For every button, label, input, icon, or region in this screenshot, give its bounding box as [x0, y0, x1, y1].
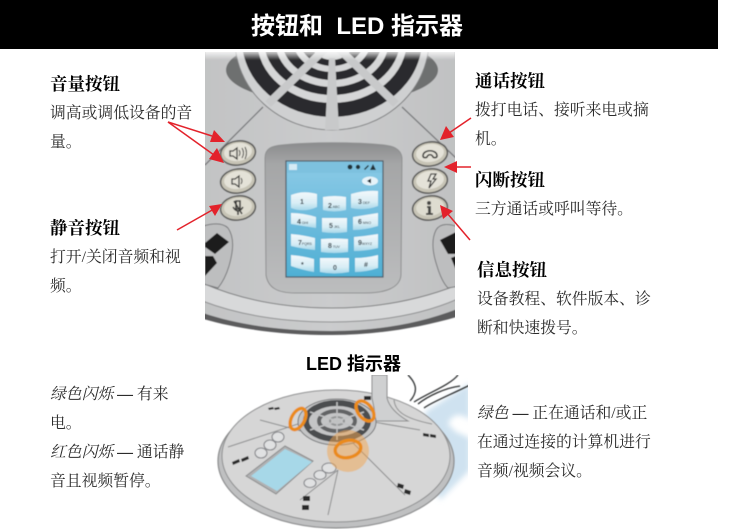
description: flash: 三方通话或呼叫等待。 — [475, 201, 633, 218]
device photo: phone top view — [205, 52, 455, 336]
keypad: 8 TUV — [328, 243, 340, 250]
description: mute: 频。 — [50, 278, 82, 295]
arrow to mute — [177, 204, 222, 230]
button: talk — [411, 140, 449, 168]
text block: flash — [475, 170, 633, 218]
panel seams — [228, 400, 432, 515]
oval buttons — [255, 432, 336, 488]
button: volume up — [219, 139, 257, 167]
speaker pad right — [432, 224, 455, 288]
keypad: 4 GHI — [297, 219, 308, 226]
keypad — [291, 191, 378, 274]
button: info — [411, 194, 449, 222]
description: mute — [50, 248, 181, 295]
speaker grille small — [298, 399, 376, 445]
description: info — [477, 290, 651, 337]
back key — [362, 176, 378, 186]
base disc — [216, 430, 456, 529]
LED indicator rings — [287, 398, 378, 460]
description: info: 设备教程、软件版本、诊 — [477, 291, 651, 308]
keypad: 0 — [333, 265, 337, 272]
blue backdrop — [425, 383, 470, 500]
red arrows — [168, 118, 471, 240]
small screen — [246, 446, 313, 494]
button: mute — [219, 194, 257, 222]
heading: info: 信息按钮 — [477, 260, 547, 280]
text block: LED green state: 在通过连接的计算机进行 — [477, 434, 651, 451]
description: mute: 打开/关闭音频和视 — [50, 249, 181, 266]
text block: volume — [50, 74, 192, 151]
keypad: 1 — [300, 199, 304, 206]
title: 按钮和 LED 指示器 — [251, 13, 463, 40]
LED highlight glow — [327, 430, 369, 472]
text block: LED green state: 绿色 — 正在通话和/或正 — [477, 405, 647, 422]
description: volume: 调高或调低设备的音 — [50, 105, 192, 122]
heading: LED indicators: LED 指示器 — [306, 354, 401, 374]
device photo: LED ring illustration — [218, 375, 470, 528]
description: talk: 拨打电话、接听来电或摘 — [475, 102, 649, 119]
heading: volume: 音量按钮 — [50, 74, 120, 94]
arrow to talk — [440, 118, 471, 140]
touch screen — [286, 161, 383, 277]
keypad: 9WXYZ — [358, 240, 373, 247]
pads — [232, 396, 436, 510]
arrow to info — [440, 205, 470, 240]
description: volume — [50, 104, 192, 151]
display bezel — [265, 143, 402, 293]
keypad: 2 ABC — [328, 203, 340, 210]
keypad: 6 MNO — [358, 219, 371, 226]
description: info: 断和快速拨号。 — [477, 320, 588, 337]
device body — [200, 48, 460, 335]
text block: LED flash states — [50, 385, 184, 490]
description: volume: 量。 — [50, 134, 82, 151]
text block: LED green state — [477, 404, 651, 480]
speaker grille — [205, 52, 455, 166]
top fade — [205, 52, 455, 60]
text block: LED green state: 音频/视频会议。 — [477, 463, 592, 480]
heading: talk: 通话按钮 — [475, 71, 545, 91]
text block: info — [477, 260, 651, 337]
title bar — [0, 0, 718, 49]
heading: mute: 静音按钮 — [50, 218, 120, 238]
button: volume down — [219, 167, 257, 195]
keypad: 5 JKL — [329, 223, 340, 230]
arrow to volume up — [168, 122, 225, 142]
description: talk: 机。 — [475, 131, 507, 148]
text block: LED flash states: 音且视频暂停。 — [50, 473, 161, 490]
text block: LED flash states: 绿色闪烁 — 有来 — [50, 386, 168, 403]
status icons — [348, 164, 376, 170]
cables — [408, 375, 470, 408]
button: flash — [411, 167, 449, 195]
description: talk — [475, 101, 649, 148]
text block: talk — [475, 71, 649, 148]
text block: LED flash states: 红色闪烁 — 通话静 — [50, 444, 184, 461]
keypad: # — [364, 262, 368, 269]
heading: flash: 闪断按钮 — [475, 170, 545, 190]
device outer rim — [200, 282, 460, 335]
arrow to flash — [444, 161, 471, 173]
speaker pad left — [200, 224, 233, 288]
text block: LED flash states: 电。 — [50, 415, 82, 432]
keypad: * — [301, 262, 304, 269]
keypad: 7PQRS — [298, 240, 312, 247]
mast — [372, 375, 408, 421]
arrow to volume down — [168, 122, 224, 163]
text block: mute — [50, 218, 181, 295]
keypad: 3 DEF — [358, 199, 370, 206]
